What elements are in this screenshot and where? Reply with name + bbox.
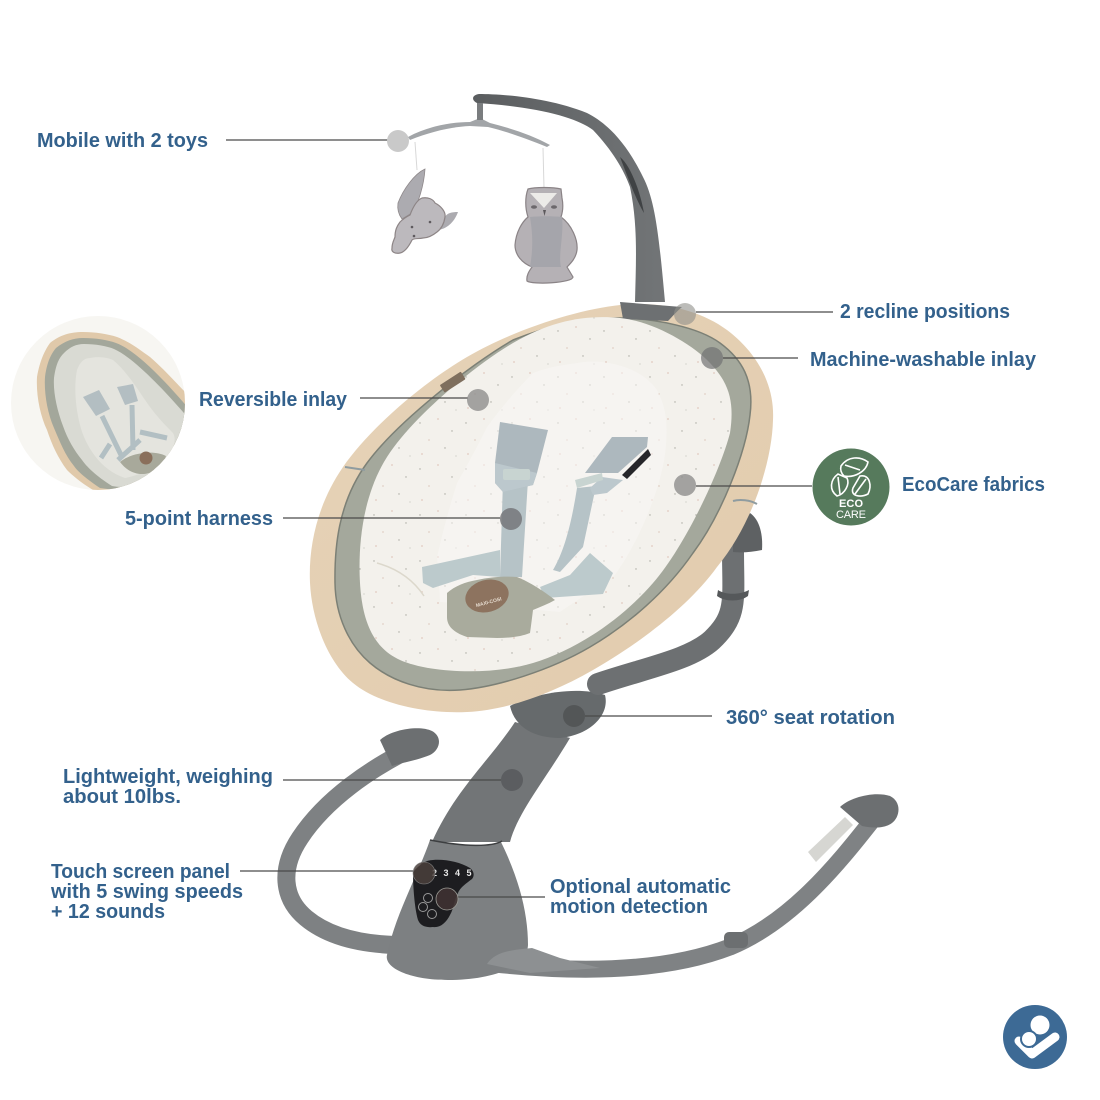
callout: 5-point harness [125, 508, 522, 530]
swing base right rail [495, 794, 898, 969]
callout: touch screen panel [50, 861, 435, 923]
callout: EcoCare fabrics: EcoCare fabrics [902, 474, 1045, 496]
control panel: 2 3 4 5 [432, 868, 474, 878]
callout: mobile with 2 toys: Mobile with 2 toys [37, 130, 208, 152]
seat frame [310, 302, 773, 712]
callout: machine-washable inlay: Machine-washable inlay [810, 349, 1037, 371]
callout: reversible inlay [199, 389, 489, 411]
five-point harness: MAXI-COSI [475, 596, 503, 609]
callout: 2 recline positions: 2 recline positions [840, 301, 1010, 323]
control panel [413, 860, 474, 927]
callout: reversible inlay: Reversible inlay [199, 389, 348, 411]
callout: 5-point harness: 5-point harness [125, 508, 273, 530]
icon: EcoCare badge: ECO [839, 498, 863, 510]
five-point harness [422, 422, 651, 638]
mobile arm [473, 94, 665, 302]
callout: optional automatic motion detection [436, 876, 731, 918]
seat inlay [360, 317, 732, 671]
callout: lightweight: Lightweight, weighing [63, 766, 273, 788]
callout: touch screen panel: Touch screen panel [51, 861, 230, 883]
toy: owl [515, 188, 577, 283]
side arm [598, 513, 762, 684]
callout: optional automatic motion detection: motion detection [550, 896, 708, 918]
callout: 360 degree seat rotation [563, 705, 895, 729]
callout: 360 degree seat rotation: 360° seat rotation [726, 707, 895, 729]
inset: reversible inlay [11, 316, 190, 500]
callout: lightweight [63, 766, 523, 808]
icon: brand parent and baby mark [1003, 1005, 1067, 1069]
product: baby swing [286, 94, 898, 980]
mobile hanger [408, 103, 550, 188]
icon: EcoCare badge: CARE [836, 509, 866, 521]
central stem and pedestal [387, 691, 606, 980]
callout: mobile with 2 toys [37, 130, 409, 152]
swing base left rail [286, 728, 439, 945]
callout: touch screen panel: + 12 sounds [51, 901, 165, 923]
callout: touch screen panel: with 5 swing speeds [50, 881, 243, 903]
icon: EcoCare badge [812, 448, 890, 526]
toy: elephant [392, 169, 458, 253]
callout: machine-washable inlay [701, 347, 1037, 371]
callout: lightweight: about 10lbs. [63, 786, 181, 808]
callout: optional automatic motion detection: Optional automatic [550, 876, 731, 898]
callout: 2 recline positions [674, 301, 1010, 325]
callout: EcoCare fabrics [674, 474, 1045, 496]
